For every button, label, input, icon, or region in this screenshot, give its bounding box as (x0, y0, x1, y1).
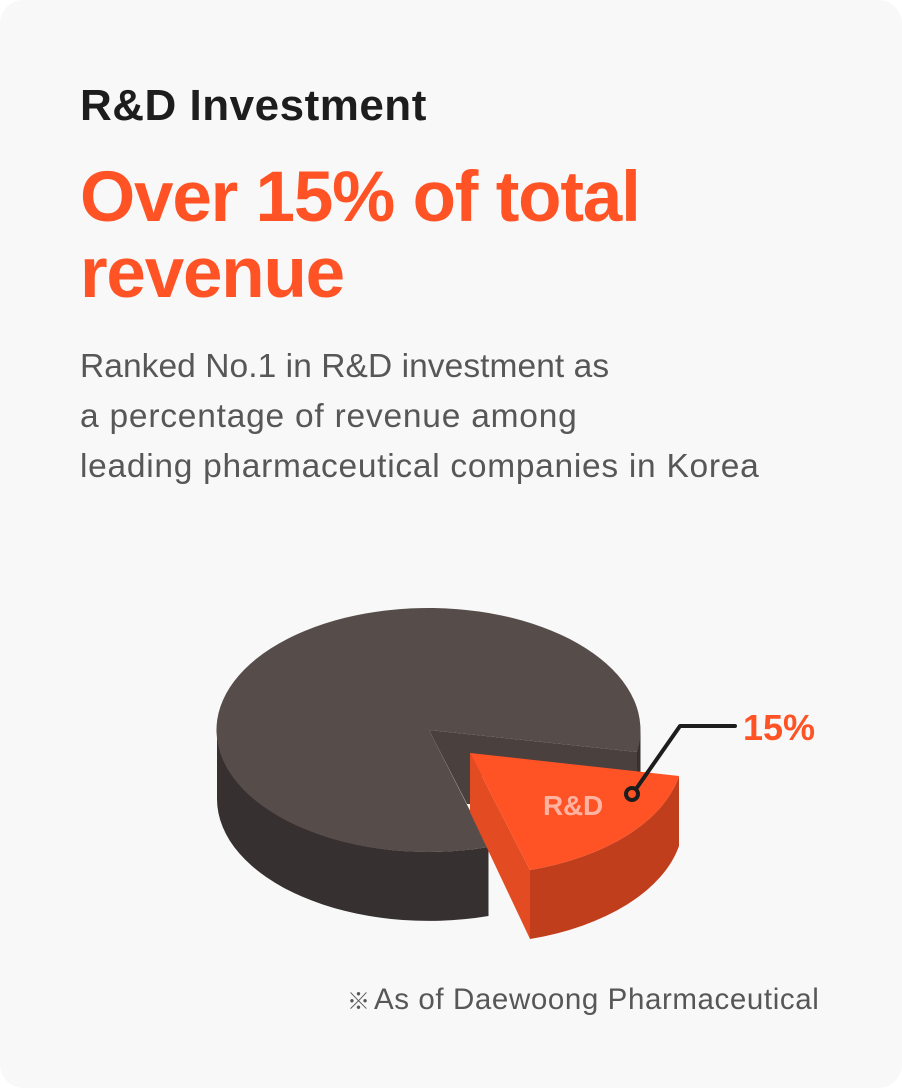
callout line (626, 726, 735, 800)
text block: description: leading pharmaceutical companies in Korea (80, 448, 759, 485)
heading: R&D Investment: R&D Investment (80, 81, 427, 130)
headline: Over 15% of total revenue (80, 158, 640, 313)
R&D slice (470, 753, 679, 939)
label: 15%: 15% (743, 707, 815, 748)
text block: description: Ranked No.1 in R&D investment as (80, 348, 609, 385)
notch inner face (429, 730, 637, 804)
dark pie back side wall (637, 730, 640, 776)
slice top face (470, 753, 679, 870)
headline: Over 15% of total revenue: Over 15% of total (80, 158, 640, 237)
headline: Over 15% of total revenue: revenue (80, 234, 344, 313)
text block: description (80, 348, 759, 485)
text block: description: a percentage of revenue among (80, 398, 578, 435)
slice left face (470, 753, 530, 939)
slice outer side (530, 776, 679, 939)
dark pie top face (216, 608, 640, 852)
label: R&D: R&D (543, 790, 603, 821)
footnote: As of Daewoong Pharmaceutical (374, 983, 819, 1016)
dark pie side wall (217, 730, 488, 921)
footnote: ※ (347, 988, 370, 1014)
